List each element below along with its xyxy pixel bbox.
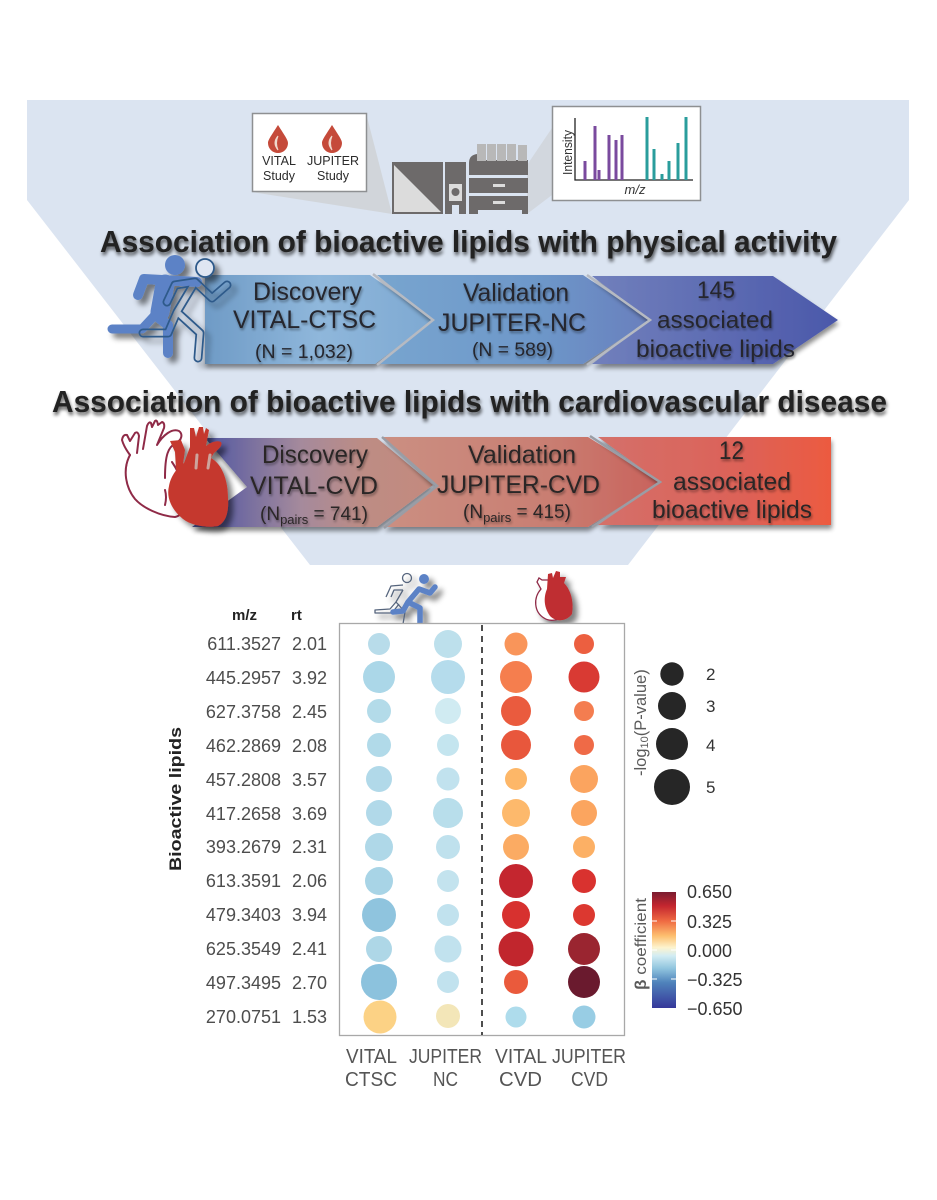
- row labels: 479.3403: [206, 905, 281, 925]
- result text: 145: [697, 277, 735, 304]
- row labels: 3.92: [292, 668, 327, 688]
- result text: [652, 437, 812, 524]
- row labels: 2.31: [292, 837, 327, 857]
- column labels: VITAL: [346, 1046, 397, 1068]
- column labels: [345, 1046, 626, 1091]
- panel: mass spectrum: [552, 106, 700, 200]
- row labels: 3.69: [292, 804, 327, 824]
- bubbles: VITAL CVD: [498, 632, 534, 1028]
- legend: p-value size: (P-value): [632, 669, 650, 736]
- icon: hearts: [122, 420, 228, 527]
- chevron: validation: [377, 275, 650, 364]
- row labels: 613.3591: [206, 871, 281, 891]
- validation text: Validation: [468, 441, 576, 469]
- teal spectrum peaks: [647, 117, 686, 180]
- discovery text: Discovery: [262, 441, 368, 469]
- plot frame: [340, 624, 624, 1036]
- row labels: 393.2679: [206, 837, 281, 857]
- row labels: 3.94: [292, 905, 327, 925]
- validation text: JUPITER-CVD: [437, 471, 600, 499]
- legend: beta coefficient colour bar: 0.650: [687, 882, 732, 902]
- row labels: 2.41: [292, 939, 327, 959]
- bubbles: JUPITER CVD: [568, 634, 600, 1028]
- row labels: 270.0751: [206, 1007, 281, 1027]
- icon: runners: [112, 255, 227, 358]
- legend: beta coefficient colour bar: β coefficient: [633, 897, 650, 990]
- discovery text: = 741): [308, 504, 368, 525]
- row labels: 497.3495: [206, 973, 281, 993]
- validation text: = 415): [511, 502, 571, 523]
- column icon: runners: [375, 574, 435, 624]
- chevron: discovery: [205, 275, 433, 364]
- validation text: pairs: [483, 510, 512, 525]
- red arrow flow: [192, 436, 831, 528]
- legend: p-value size: 5: [706, 778, 715, 797]
- axis headers: [232, 607, 302, 624]
- legend: beta coefficient colour bar: −0.325: [687, 970, 743, 990]
- blue arrow flow: [205, 274, 838, 365]
- result text: [636, 277, 795, 363]
- purple spectrum peaks: [585, 126, 622, 180]
- panel: mass spectrum: Intensity: [560, 130, 575, 175]
- column labels: JUPITER: [409, 1046, 482, 1068]
- row labels: 2.06: [292, 871, 327, 891]
- legend: p-value size: 4: [706, 736, 715, 755]
- discovery text: pairs: [280, 512, 309, 527]
- row labels: 462.2869: [206, 736, 281, 756]
- row labels: 627.3758: [206, 702, 281, 722]
- panel: study samples: [252, 114, 366, 192]
- icon: VITAL blood drop: [268, 125, 288, 153]
- result text: associated: [673, 468, 791, 496]
- legend: p-value size: 3: [706, 697, 715, 716]
- validation text: JUPITER-NC: [438, 309, 586, 337]
- row labels: 1.53: [292, 1007, 327, 1027]
- result text: bioactive lipids: [652, 496, 812, 524]
- result text: bioactive lipids: [636, 336, 795, 363]
- row labels: 2.45: [292, 702, 327, 722]
- discovery text: [233, 278, 376, 363]
- row labels: 2.01: [292, 634, 327, 654]
- outline runner: [143, 259, 227, 358]
- sample labels: JUPITER: [307, 154, 359, 168]
- row labels: 445.2957: [206, 668, 281, 688]
- discovery text: (N: [260, 504, 280, 525]
- column labels: CVD: [499, 1069, 542, 1091]
- row labels: 457.2808: [206, 770, 281, 790]
- axis headers: rt: [291, 607, 302, 624]
- legend: beta coefficient colour bar: 0.000: [687, 941, 732, 961]
- legend: beta coefficient colour bar: [633, 882, 743, 1019]
- validation text: [438, 279, 586, 361]
- chevron: discovery: [192, 438, 433, 527]
- validation text: (N: [463, 502, 483, 523]
- axis headers: m/z: [232, 607, 257, 624]
- sample labels: Study: [263, 169, 296, 183]
- sample labels: VITAL: [262, 154, 296, 168]
- validation text: (N = 589): [472, 340, 553, 361]
- y axis title: Bioactive lipids: [166, 727, 185, 871]
- solid heart: [168, 427, 228, 527]
- icon: JUPITER blood drop: [322, 125, 342, 153]
- chevron: validation: [383, 437, 660, 527]
- result text: 12: [719, 437, 744, 465]
- legend: beta coefficient colour bar: 0.325: [687, 912, 732, 932]
- row labels: 2.08: [292, 736, 327, 756]
- result text: associated: [657, 307, 773, 334]
- sample to instrument panel: [252, 113, 392, 214]
- chevron: result: [592, 276, 838, 364]
- column icon: heart: [536, 571, 573, 620]
- row labels: 625.3549: [206, 939, 281, 959]
- legend: p-value size: 2: [706, 665, 715, 684]
- row labels: 2.70: [292, 973, 327, 993]
- legend: p-value size: [632, 662, 715, 805]
- infographic: [27, 100, 909, 1086]
- outline heart: [122, 420, 183, 517]
- legend: p-value size: 10: [639, 736, 651, 748]
- bubbles: VITAL CTSC: [361, 633, 397, 1034]
- discovery text: (N = 1,032): [255, 341, 353, 363]
- row labels: [206, 634, 327, 1027]
- legend: p-value size: -log: [632, 748, 650, 776]
- discovery text: VITAL-CTSC: [233, 306, 376, 334]
- icon: mass spectrometer: [392, 128, 552, 214]
- chevron: result: [598, 437, 831, 525]
- legend: beta coefficient colour bar: −0.650: [687, 999, 743, 1019]
- heading: physical activity: Association of bioactive lipids with physical activity: [100, 224, 838, 259]
- bubble chart: [340, 571, 624, 1036]
- panel: mass spectrum: m/z: [625, 182, 646, 197]
- column labels: NC: [433, 1069, 458, 1091]
- column labels: CTSC: [345, 1069, 397, 1091]
- column labels: CVD: [571, 1069, 608, 1091]
- column labels: VITAL: [495, 1046, 547, 1068]
- heading: cardiovascular disease: Association of bioactive lipids with cardiovascular disease: [52, 384, 887, 419]
- discovery text: VITAL-CVD: [250, 472, 378, 500]
- row labels: 611.3527: [207, 634, 281, 654]
- column labels: JUPITER: [552, 1046, 626, 1068]
- validation text: Validation: [463, 279, 569, 307]
- row labels: 417.2658: [206, 804, 281, 824]
- discovery text: Discovery: [253, 278, 362, 306]
- sample labels: [262, 154, 359, 183]
- row labels: 3.57: [292, 770, 327, 790]
- discovery text: [250, 441, 378, 527]
- sample labels: Study: [317, 169, 350, 183]
- validation text: [437, 441, 600, 525]
- bubbles: JUPITER NC: [431, 630, 465, 1028]
- solid runner: [112, 255, 197, 353]
- funnel background: [27, 100, 909, 565]
